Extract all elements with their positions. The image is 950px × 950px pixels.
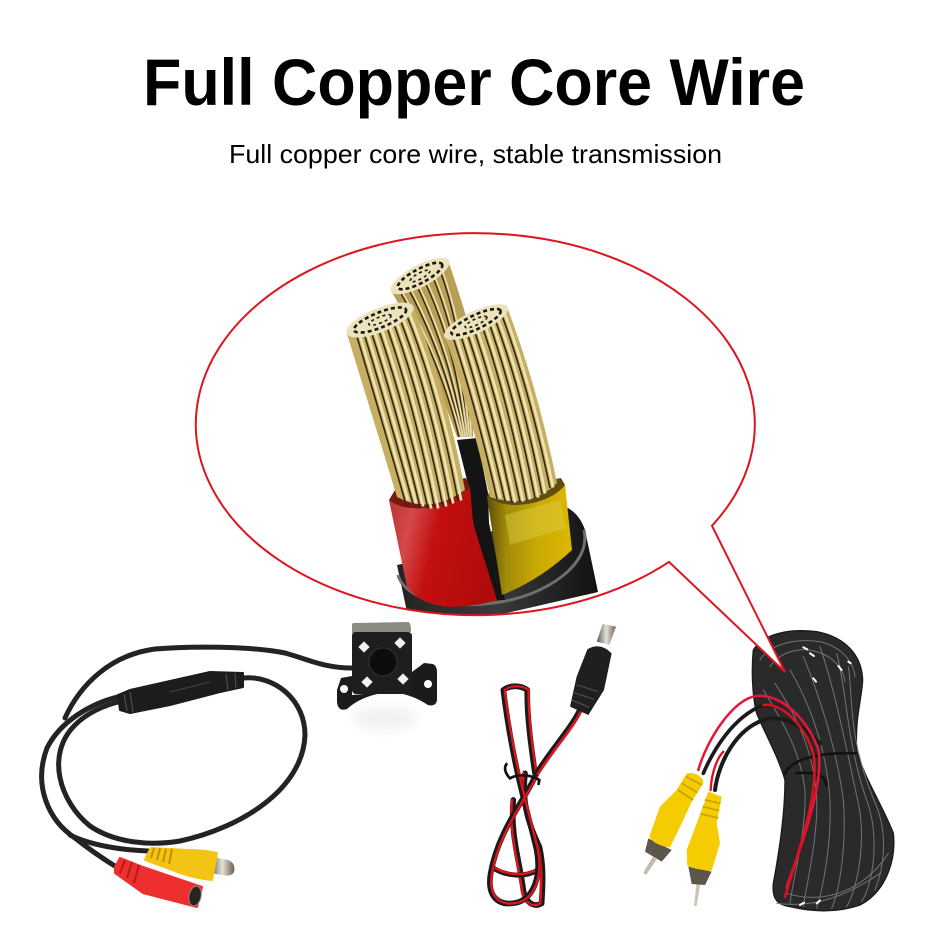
product: reversing camera with cables (42, 622, 437, 907)
red RCA socket (115, 858, 203, 907)
inline connector (118, 672, 243, 713)
product: coiled RCA video cable (643, 631, 894, 911)
speech balloon outline (196, 233, 785, 672)
camera cables (42, 647, 352, 868)
yellow RCA plug left (643, 773, 703, 875)
title: Full Copper Core Wire (143, 45, 805, 119)
black inner core (457, 438, 505, 600)
LED lights (358, 637, 409, 688)
back copper strand (386, 251, 474, 437)
black outer sheath (397, 508, 598, 625)
bracket holes (340, 680, 432, 693)
cable ties (785, 753, 857, 787)
mounting bracket (337, 663, 437, 710)
yellow RCA plug right (687, 792, 722, 906)
power plug (570, 624, 616, 715)
left copper strand (342, 295, 465, 509)
wire tie (505, 763, 539, 785)
camera body (352, 622, 412, 694)
paired red and black wire (490, 686, 581, 905)
speech balloon fill (196, 233, 785, 672)
camera shadow (353, 706, 417, 730)
yellow RCA socket (145, 848, 234, 880)
product: DC power cable (490, 624, 616, 905)
coil of black cable (752, 631, 894, 911)
red insulated core (389, 478, 497, 607)
right copper strand (440, 297, 557, 503)
zoomed cable illustration (342, 251, 598, 625)
yellow insulated core (487, 478, 572, 595)
pigtail wires (698, 696, 820, 897)
lens (369, 648, 397, 676)
subtitle: Full copper core wire, stable transmission (229, 139, 722, 169)
